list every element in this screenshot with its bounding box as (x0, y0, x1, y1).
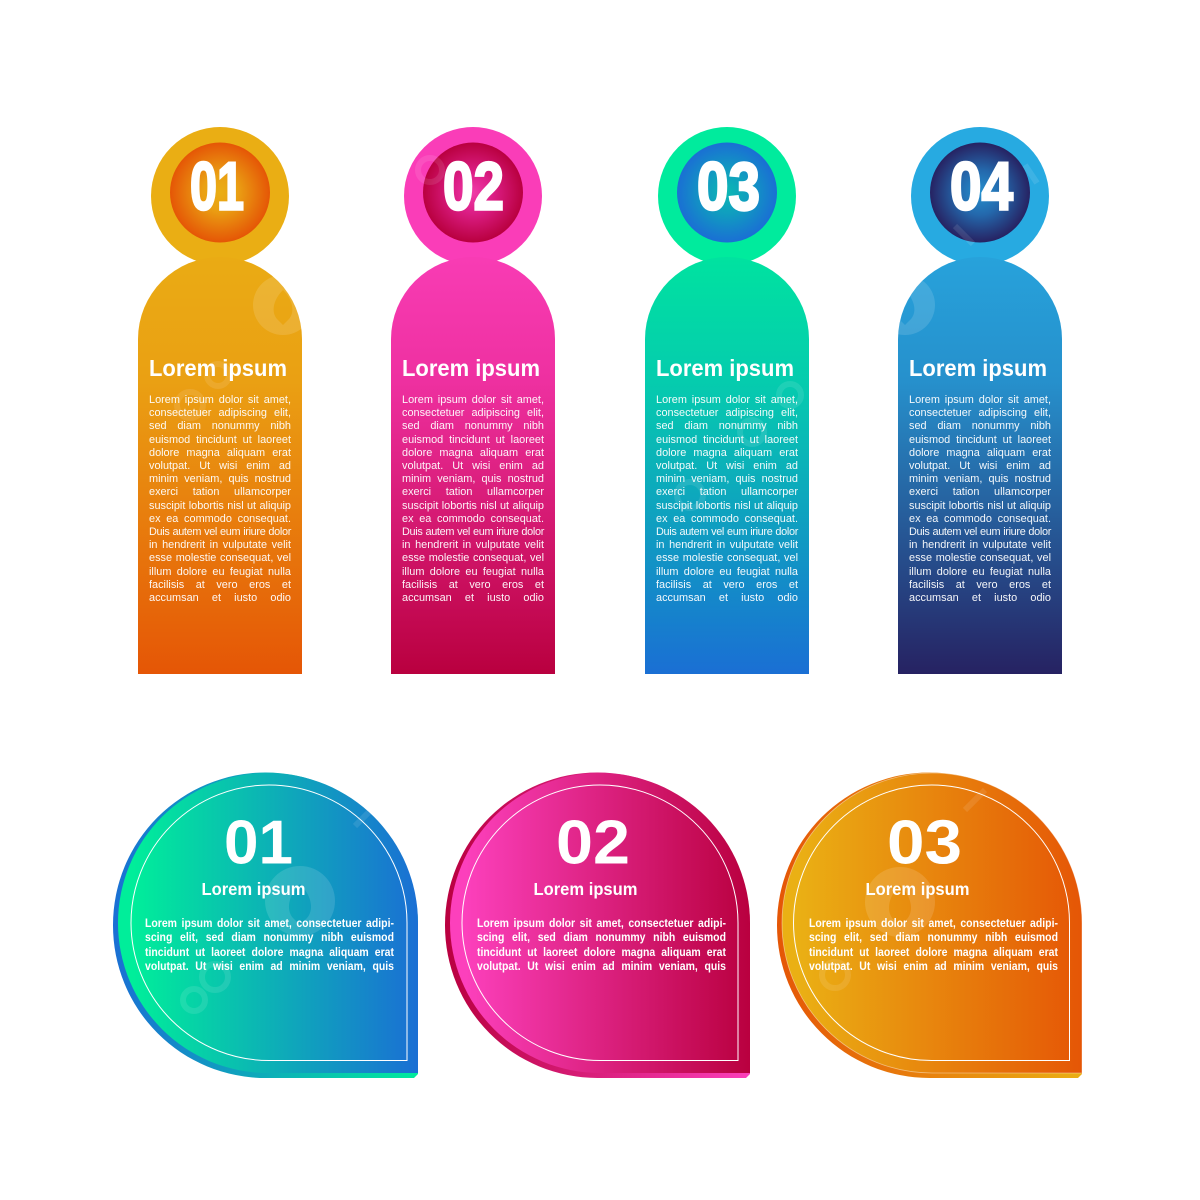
text block 02: ex ea commodo consequat. (402, 513, 544, 525)
panel: teardrop card 03 (777, 772, 1082, 1078)
icon: inner disc 01 (170, 142, 270, 242)
heading 03: Lorem ipsum (656, 355, 794, 381)
icon: inner disc 04 (930, 142, 1030, 242)
heading 02: Lorem ipsum (534, 879, 638, 899)
text block 03: dolore magna aliquam erat (656, 447, 798, 459)
text block 01: in hendrerit in vulputate velit (149, 539, 291, 551)
text block 04: Lorem ipsum dolor sit amet, (909, 394, 1051, 406)
heading 03: Lorem ipsum (866, 879, 970, 899)
text block 02: sed diam nonummy nibh (402, 420, 544, 432)
text block 03: volutpat. Ut wisi enim ad minim veniam, quis (809, 961, 1058, 973)
text block 01: tincidunt ut laoreet dolore magna aliquam erat (145, 947, 394, 959)
text block 04: euismod tincidunt ut laoreet (909, 434, 1051, 446)
text block 02 (477, 918, 726, 973)
card body 02 (391, 257, 555, 674)
icon: head circle 03 (658, 127, 796, 265)
heading 01: Lorem ipsum (202, 879, 306, 899)
text block 02: in hendrerit in vulputate velit (402, 539, 544, 551)
text block 03: exerci tation ullamcorper (656, 486, 798, 498)
inner outline 03 (794, 785, 1070, 1060)
text block 04: facilisis at vero eros et (909, 579, 1051, 591)
card body 01 (138, 257, 302, 674)
text block 03: ex ea commodo consequat. (656, 513, 798, 525)
text block 03: Lorem ipsum dolor sit amet, consectetuer adipi- (809, 918, 1058, 930)
text block 04: volutpat. Ut wisi enim ad (909, 460, 1051, 472)
text block 03: esse molestie consequat, vel (656, 552, 798, 564)
icon: inner disc 02 (423, 142, 523, 242)
text block 01: illum dolore eu feugiat nulla (149, 566, 291, 578)
text block 01: Duis autem vel eum iriure dolor (149, 526, 291, 538)
text block 03: in hendrerit in vulputate velit (656, 539, 798, 551)
text block 04: accumsan et iusto odio (909, 592, 1051, 604)
text block 02: suscipit lobortis nisl ut aliquip (402, 500, 544, 512)
text block 02: dolore magna aliquam erat (402, 447, 544, 459)
text block 03: minim veniam, quis nostrud (656, 473, 798, 485)
panel: tall card 03 (645, 127, 809, 674)
text block 01: suscipit lobortis nisl ut aliquip (149, 500, 291, 512)
text block 01: accumsan et iusto odio (149, 592, 291, 604)
text block 02: Lorem ipsum dolor sit amet, consectetuer adipi- (477, 918, 726, 930)
text block 01: Lorem ipsum dolor sit amet, consectetuer adipi- (145, 918, 394, 930)
text block 01: euismod tincidunt ut laoreet (149, 434, 291, 446)
text block 04: exerci tation ullamcorper (909, 486, 1051, 498)
text block 02: euismod tincidunt ut laoreet (402, 434, 544, 446)
number 02: 02 (443, 148, 504, 224)
text block 04: esse molestie consequat, vel (909, 552, 1051, 564)
card body 04 (898, 257, 1062, 674)
panel: tall card 02 (391, 127, 555, 674)
text block 01: volutpat. Ut wisi enim ad (149, 460, 291, 472)
number 02: 02 (556, 808, 630, 878)
panel: teardrop card 01 (113, 772, 418, 1078)
text block 04: illum dolore eu feugiat nulla (909, 566, 1051, 578)
text block 02: Duis autem vel eum iriure dolor (402, 526, 544, 538)
text block 04: dolore magna aliquam erat (909, 447, 1051, 459)
text block 03: euismod tincidunt ut laoreet (656, 434, 798, 446)
heading 01: Lorem ipsum (149, 355, 287, 381)
text block 04: consectetuer adipiscing elit, (909, 407, 1051, 419)
text block 04: ex ea commodo consequat. (909, 513, 1051, 525)
text block 02: illum dolore eu feugiat nulla (402, 566, 544, 578)
text block 03: consectetuer adipiscing elit, (656, 407, 798, 419)
text block 01: Lorem ipsum dolor sit amet, (149, 394, 291, 406)
text block 03: sed diam nonummy nibh (656, 420, 798, 432)
number 04: 04 (950, 148, 1013, 224)
heading 04: Lorem ipsum (909, 355, 1047, 381)
text block 03: volutpat. Ut wisi enim ad (656, 460, 798, 472)
panel: tall card 01 (138, 127, 302, 674)
number 03: 03 (887, 808, 962, 878)
text block 01: ex ea commodo consequat. (149, 513, 291, 525)
text block 02: volutpat. Ut wisi enim ad minim veniam, quis (477, 961, 726, 973)
text block 01: facilisis at vero eros et (149, 579, 291, 591)
panel: teardrop card 02 (445, 772, 750, 1078)
text block 04: in hendrerit in vulputate velit (909, 539, 1051, 551)
text block 02: exerci tation ullamcorper (402, 486, 544, 498)
panel: tall card 04 (898, 127, 1062, 674)
icon: head circle 01 (151, 127, 289, 265)
text block 01: exerci tation ullamcorper (149, 486, 291, 498)
text block 02: scing elit, sed diam nonummy nibh euismod (477, 932, 726, 944)
teardrop back shape 03 (777, 772, 1082, 1078)
text block 01: dolore magna aliquam erat (149, 447, 291, 459)
text block 02: consectetuer adipiscing elit, (402, 407, 544, 419)
text block 01: volutpat. Ut wisi enim ad minim veniam, quis (145, 961, 394, 973)
inner outline 02 (462, 785, 738, 1060)
teardrop front shape 01 (118, 773, 418, 1073)
text block 03: Lorem ipsum dolor sit amet, (656, 394, 798, 406)
text block 01: scing elit, sed diam nonummy nibh euismod (145, 932, 394, 944)
text block 01: esse molestie consequat, vel (149, 552, 291, 564)
text block 03 (656, 394, 798, 604)
text block 03: tincidunt ut laoreet dolore magna aliquam erat (809, 947, 1058, 959)
icon: head circle 04 (911, 127, 1049, 265)
text block 02: Lorem ipsum dolor sit amet, (402, 394, 544, 406)
text block 04 (909, 394, 1052, 604)
text block 04: sed diam nonummy nibh (909, 420, 1051, 432)
text block 02: accumsan et iusto odio (402, 592, 544, 604)
text block 01 (145, 918, 394, 973)
card body 03 (645, 257, 809, 674)
text block 01: consectetuer adipiscing elit, (149, 407, 291, 419)
text block 03 (809, 918, 1058, 973)
text block 03: Duis autem vel eum iriure dolor (656, 526, 798, 538)
icon: head circle 02 (404, 127, 542, 265)
inner outline 01 (131, 785, 407, 1060)
teardrop front shape 03 (782, 773, 1082, 1073)
text block 04: suscipit lobortis nisl ut aliquip (909, 500, 1051, 512)
text block 03: facilisis at vero eros et (656, 579, 798, 591)
teardrop front shape 02 (450, 773, 750, 1073)
text block 03: illum dolore eu feugiat nulla (656, 566, 798, 578)
teardrop back shape 01 (113, 772, 418, 1078)
heading 02: Lorem ipsum (402, 355, 540, 381)
text block 02 (402, 394, 544, 604)
number 01: 01 (224, 808, 293, 878)
number 01: 01 (190, 148, 244, 224)
text block 04: minim veniam, quis nostrud (909, 473, 1051, 485)
number 03: 03 (697, 148, 760, 224)
icon: inner disc 03 (677, 142, 777, 242)
text block 01: minim veniam, quis nostrud (149, 473, 291, 485)
text block 01: sed diam nonummy nibh (149, 420, 291, 432)
teardrop back shape 02 (445, 772, 750, 1078)
text block 03: accumsan et iusto odio (656, 592, 798, 604)
text block 02: volutpat. Ut wisi enim ad (402, 460, 544, 472)
text block 03: suscipit lobortis nisl ut aliquip (656, 500, 798, 512)
text block 02: tincidunt ut laoreet dolore magna aliquam erat (477, 947, 726, 959)
text block 04: Duis autem vel eum iriure dolor (909, 526, 1051, 538)
text block 02: facilisis at vero eros et (402, 579, 544, 591)
text block 03: scing elit, sed diam nonummy nibh euismod (809, 932, 1058, 944)
text block 02: esse molestie consequat, vel (402, 552, 544, 564)
text block 01 (149, 394, 292, 604)
text block 02: minim veniam, quis nostrud (402, 473, 544, 485)
